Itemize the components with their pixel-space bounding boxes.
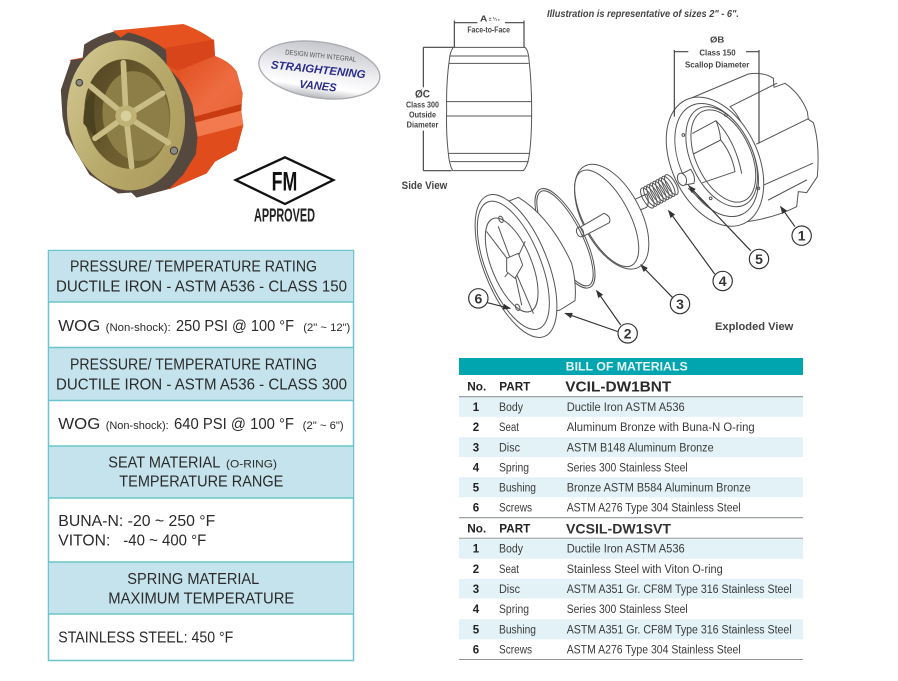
table: VCIL-DW1BNT: 3 (473, 442, 479, 454)
table: VCSIL-DW1SVT: VCSIL-DW1SVT (566, 520, 671, 536)
table: VCIL-DW1BNT: 6 (473, 502, 479, 514)
table: VCIL-DW1BNT: Bushing (499, 482, 536, 494)
dimension: scallop diameter B: Class 150 (699, 49, 736, 58)
row: seat material heading: (O-RING) (226, 458, 277, 470)
table: VCSIL-DW1SVT: Bushing (499, 624, 536, 636)
part: bushing (676, 169, 707, 205)
table: VCSIL-DW1SVT: Seat (499, 564, 520, 576)
table: VCSIL-DW1SVT: 1 (473, 544, 480, 556)
diagram: exploded view, disc, o-ring and flange seat (458, 152, 690, 348)
row: seat temperature values (58, 513, 216, 550)
diagram: side view: Side View (402, 180, 448, 192)
row: class 150 WOG value: WOG (58, 318, 100, 335)
note: illustration size range: Illustration is representative of sizes 2" - 6". (547, 9, 739, 20)
row: seat temperature values: BUNA-N: -20 ~ 250 °F (58, 513, 216, 530)
part: valve body (647, 73, 818, 242)
row: class 150 WOG value (58, 318, 350, 335)
row: spring material heading: SPRING MATERIAL (127, 571, 259, 588)
row: class 150 WOG value: 250 PSI @ 100 °F (176, 318, 294, 335)
diagram: side view: ØC (415, 88, 430, 100)
table: VCIL-DW1BNT: VCIL-DW1BNT (565, 379, 671, 396)
table: VCSIL-DW1SVT: 3 (473, 584, 479, 596)
row: class 150 rating heading (49, 251, 353, 302)
table: VCIL-DW1BNT: Spring (499, 462, 529, 474)
table: VCIL-DW1BNT: Series 300 Stainless Steel (567, 462, 688, 474)
callout: part 4: 4 (719, 273, 727, 289)
table: VCSIL-DW1SVT: 5 (473, 624, 480, 636)
diagram: side view: Face-to-Face (467, 26, 510, 35)
table: VCSIL-DW1SVT: 6 (473, 644, 479, 656)
row: seat material heading: SEAT MATERIAL (108, 454, 220, 471)
callout: part 5: 5 (755, 251, 763, 267)
table: VCSIL-DW1SVT: Spring (499, 604, 529, 616)
table: VCIL-DW1BNT: Screws (499, 502, 532, 514)
table: VCSIL-DW1SVT: ASTM A351 Gr. CF8M Type 316 Stainless Steel (567, 624, 792, 636)
row: class 150 WOG value: (2" ~ 12") (303, 322, 350, 334)
badge: design with integral straightening vanes (255, 34, 384, 106)
dimension: scallop diameter B: Scallop Diameter (685, 61, 749, 70)
row: seat temperature values: VITON: (58, 533, 110, 550)
badge: design with integral straightening vanes: STRAIGHTENING (270, 59, 366, 81)
table: VCSIL-DW1SVT: Stainless Steel with Viton O-ring (567, 564, 723, 576)
row: seat material heading: TEMPERATURE RANGE (119, 474, 283, 491)
callout: part 2 (565, 291, 637, 343)
callout: part 2: 2 (624, 325, 632, 341)
diagram: side view: Class 300 (406, 100, 439, 109)
table: VCIL-DW1BNT: PART (499, 382, 530, 394)
heading band (459, 358, 803, 375)
row: class 300 WOG value (58, 416, 344, 433)
diagram: side view: Outside (409, 110, 436, 119)
diagram: side view: Diameter (407, 120, 438, 129)
table: VCIL-DW1BNT: Ductile Iron ASTM A536 (567, 402, 685, 414)
row: class 300 rating heading: PRESSURE/ TEMPERATURE RATING (70, 357, 317, 374)
row: seat temperature values: -40 ~ 400 °F (123, 533, 207, 550)
table: VCSIL-DW1SVT: ASTM A276 Type 304 Stainless Steel (567, 644, 741, 656)
table: VCIL-DW1BNT: 2 (473, 422, 479, 434)
callout: part 4 (669, 211, 732, 291)
table: VCSIL-DW1SVT: No. (467, 524, 486, 536)
table: VCIL-DW1BNT: ASTM A276 Type 304 Stainless Steel (567, 502, 741, 514)
table: VCIL-DW1BNT: No. (467, 382, 486, 394)
table: VCSIL-DW1SVT: Ductile Iron ASTM A536 (567, 544, 685, 556)
diagram: side view: A (480, 14, 488, 24)
table: VCSIL-DW1SVT: Disc (499, 584, 520, 596)
part: flange seat (458, 184, 575, 348)
callout: part 6: 6 (474, 290, 482, 306)
row: class 150 rating heading: DUCTILE IRON - ASTM A536 - CLASS 150 (56, 279, 347, 296)
table: VCIL-DW1BNT: Body (499, 402, 523, 414)
table: VCSIL-DW1SVT: 2 (473, 564, 479, 576)
diagram: side view: ± ¹⁄₁₆ (489, 17, 500, 23)
table: VCSIL-DW1SVT: Series 300 Stainless Steel (567, 604, 688, 616)
table: VCSIL-DW1SVT: 4 (473, 604, 480, 616)
table: VCSIL-DW1SVT (459, 520, 803, 660)
dimension: scallop diameter B (674, 35, 759, 143)
caption: exploded view: Exploded View (715, 321, 794, 333)
table: VCSIL-DW1SVT: ASTM A351 Gr. CF8M Type 316 Stainless Steel (567, 584, 792, 596)
table: VCIL-DW1BNT: Bronze ASTM B584 Aluminum Bronze (567, 482, 751, 494)
dimension: scallop diameter B: ØB (710, 35, 724, 45)
table: VCIL-DW1BNT: 1 (473, 402, 480, 414)
part: spring (638, 173, 681, 210)
callout: part 1 (781, 207, 811, 245)
table: VCIL-DW1BNT: Aluminum Bronze with Buna-N O-ring (567, 422, 755, 434)
table: VCIL-DW1BNT: Seat (499, 422, 520, 434)
table: VCIL-DW1BNT: 5 (473, 482, 480, 494)
callout: part 5 (689, 186, 769, 269)
row: spring temperature value: STAINLESS STEEL: 450 °F (58, 630, 233, 647)
panel: bill of materials (459, 358, 803, 660)
callout: part 3: 3 (676, 296, 684, 312)
row: class 300 WOG value: 640 PSI @ 100 °F (174, 416, 294, 433)
table: VCSIL-DW1SVT: PART (499, 524, 530, 536)
badge: design with integral straightening vanes: VANES (299, 79, 337, 95)
panel: ratings table (48, 250, 354, 660)
callout: part 3 (641, 265, 690, 314)
row: class 300 WOG value: (Non-shock): (106, 420, 169, 432)
row: spring material heading: MAXIMUM TEMPERATURE (108, 590, 294, 607)
diagram: side view (402, 14, 532, 192)
row: class 300 rating heading: DUCTILE IRON - ASTM A536 - CLASS 300 (56, 376, 347, 393)
row: class 300 rating heading (49, 348, 353, 400)
callout: part 1: 1 (798, 228, 806, 244)
table: VCIL-DW1BNT (459, 379, 803, 518)
row: class 150 rating heading: PRESSURE/ TEMPERATURE RATING (70, 259, 317, 276)
table: VCSIL-DW1SVT: Screws (499, 644, 532, 656)
part: disc (559, 152, 664, 281)
product photo: wafer check valve (57, 24, 243, 198)
row: seat material heading (49, 446, 353, 498)
table: VCSIL-DW1SVT: Body (499, 544, 523, 556)
table: VCIL-DW1BNT: ASTM B148 Aluminum Bronze (567, 442, 714, 454)
diagram: exploded view, valve body and spring (638, 35, 818, 333)
FM approved logo: APPROVED (254, 204, 315, 225)
badge: design with integral straightening vanes: DESIGN WITH INTEGRAL (285, 49, 357, 64)
table: VCIL-DW1BNT: Disc (499, 442, 520, 454)
heading band: BILL OF MATERIALS (566, 360, 688, 374)
callout: part 6 (469, 289, 510, 308)
FM approved logo: FM (272, 166, 297, 196)
row: class 300 WOG value: WOG (58, 416, 100, 433)
table: VCIL-DW1BNT: 4 (473, 462, 480, 474)
FM approved logo (236, 157, 333, 225)
part: o-ring (523, 181, 607, 296)
row: spring material heading (49, 562, 353, 614)
row: class 300 WOG value: (2" ~ 6") (303, 420, 344, 432)
row: class 150 WOG value: (Non-shock): (106, 322, 171, 334)
